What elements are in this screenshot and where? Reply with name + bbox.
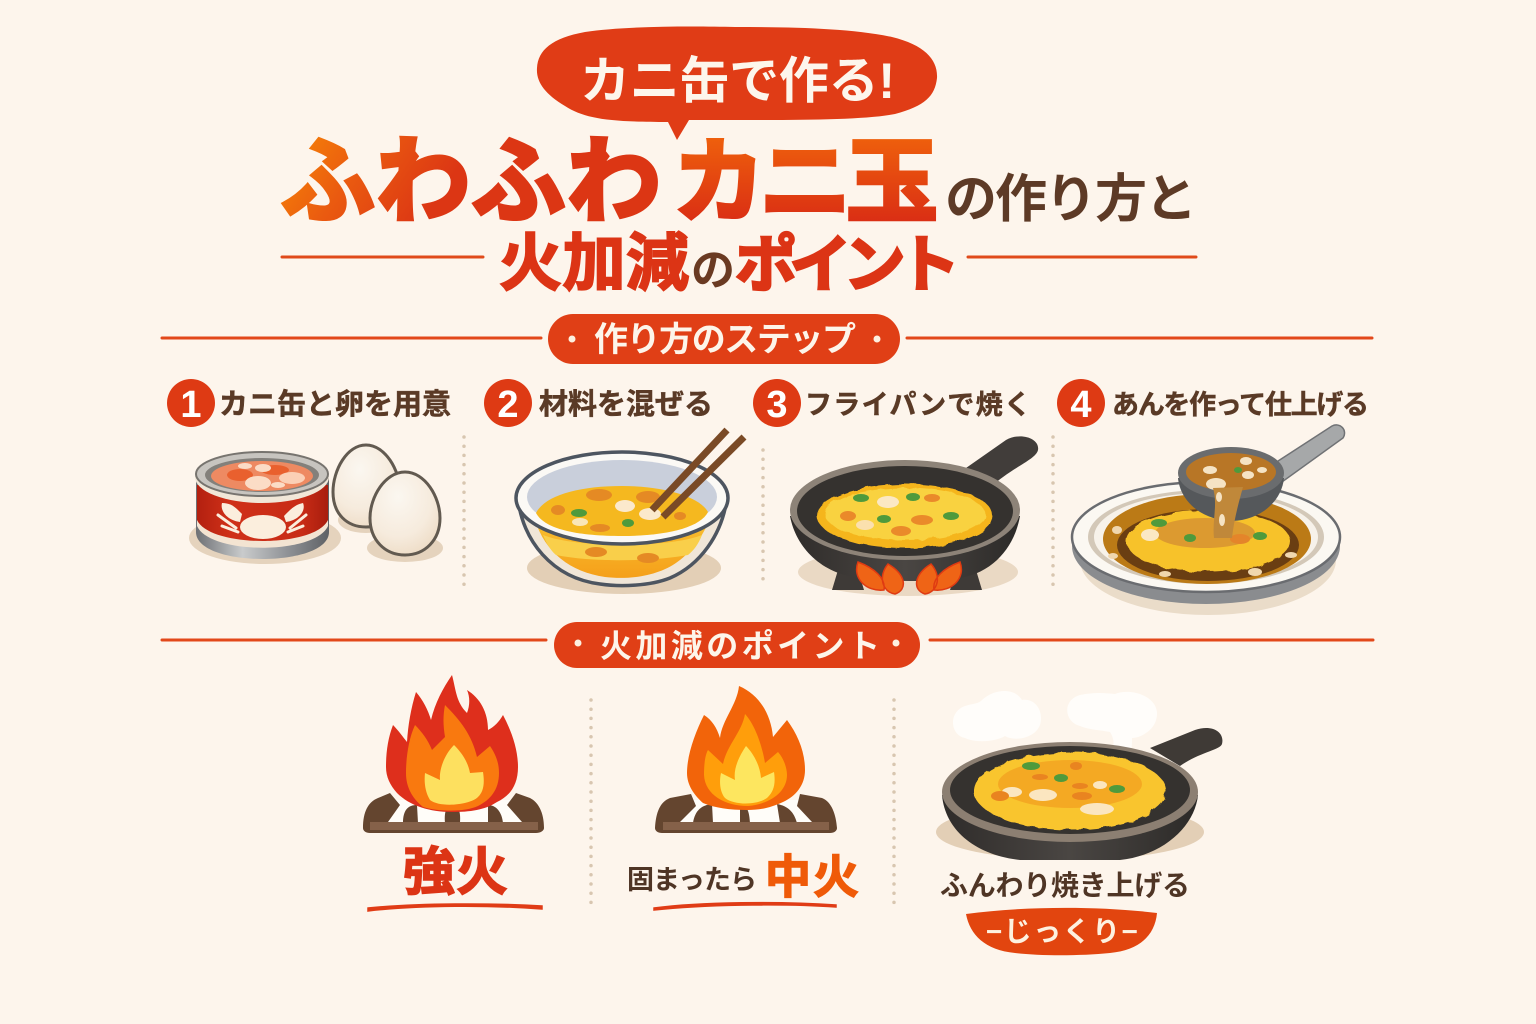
icon: burner 2: [655, 794, 837, 833]
main title line 1: の作り方と: [945, 171, 1197, 229]
step 4 heading: [1057, 379, 1369, 427]
icon: plate with omelet and sauce: [1072, 482, 1340, 615]
step 1 heading: カニ缶と卵を用意: [219, 388, 451, 421]
step 4 heading: 4: [1070, 384, 1092, 426]
badge: じっくり: −じっくり−: [986, 916, 1138, 947]
step 4 heading: あんを作って仕上げる: [1112, 390, 1369, 420]
main title line 2: ポイント: [735, 231, 960, 300]
icon: steam clouds: [953, 691, 1157, 770]
section heading: heat control: [162, 622, 1373, 668]
step 3: [753, 379, 1038, 596]
section heading: heat control: 火加減のポイント: [600, 628, 880, 664]
step 3 heading: 3: [766, 384, 788, 426]
label: 固まったら中火: [627, 851, 859, 910]
main title line 1: カニ玉: [673, 132, 938, 234]
main title line 2: の: [691, 246, 735, 295]
speech bubble: カニ缶で作る: [537, 27, 937, 140]
section heading: steps: 作り方のステップ: [594, 321, 856, 359]
divider: heat: [591, 700, 894, 910]
divider: steps: [464, 437, 1053, 585]
step 1 heading: 1: [180, 384, 202, 426]
step 2 heading: 材料を混ぜる: [539, 388, 713, 421]
icon: mixing bowl with chopsticks: [516, 430, 744, 594]
icon: eggs: [333, 445, 443, 562]
icon: medium flame: [687, 686, 805, 810]
speech bubble: カニ缶で作る: カニ缶で作る!: [580, 53, 895, 109]
icon: strong flame: [386, 675, 518, 812]
icon: burner 1: [363, 793, 544, 833]
heat 3: gentle: [936, 691, 1222, 955]
step 4: [1057, 379, 1369, 615]
title block: [281, 27, 1197, 300]
step 2: [484, 379, 744, 594]
step 3 heading: [753, 379, 1031, 427]
label: 強火: [368, 844, 542, 911]
label: ふんわり焼き上げる: ふんわり焼き上げる: [940, 870, 1190, 901]
step 1 heading: [167, 379, 451, 427]
main title line 1: [281, 129, 1197, 234]
icon: ladle pouring sauce: [1178, 425, 1345, 538]
badge: じっくり: [966, 908, 1157, 955]
heat 1: strong: [363, 675, 544, 911]
section heading: steps: [162, 314, 1372, 364]
step 3 heading: フライパンで焼く: [805, 390, 1031, 420]
main title line 2: [282, 229, 1196, 300]
step 2 heading: [484, 379, 713, 427]
main title line 1: ふわふわ: [281, 129, 661, 234]
label: 固まったら中火: 中火: [765, 851, 859, 903]
label: 固まったら中火: 固まったら: [627, 865, 757, 895]
step 2 heading: 2: [497, 384, 519, 426]
main title line 2: 火加減: [499, 229, 689, 299]
step 1: [167, 379, 451, 564]
icon: crab can: [189, 451, 341, 564]
heat 2: medium: [627, 686, 859, 910]
label: 強火: 強火: [403, 844, 508, 902]
icon: frying pan: [936, 728, 1222, 860]
icon: frying pan over flame: [790, 436, 1038, 596]
